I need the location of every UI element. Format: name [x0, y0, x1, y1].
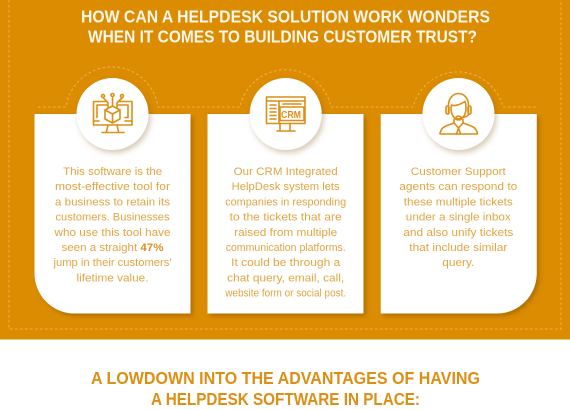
card 2 text: chat query, email, call, — [227, 272, 344, 284]
title: WHEN IT COMES TO BUILDING CUSTOMER TRUST? — [88, 27, 477, 47]
card 3 text: Customer Support — [411, 166, 506, 178]
card 2 icon circle — [250, 78, 322, 150]
dashed connector with arcs — [38, 67, 536, 107]
card 3 text: these multiple tickets — [404, 196, 513, 208]
card 1 text: a business to retain its — [55, 196, 171, 208]
card 3 text: agents can respond to — [399, 181, 517, 193]
card 2 text: communication platforms. — [226, 242, 346, 254]
panel: card 2 — [208, 78, 364, 314]
panel: card 1 — [34, 78, 190, 314]
section heading: A LOWDOWN INTO THE ADVANTAGES OF HAVING — [91, 368, 480, 388]
card 3 text: query. — [442, 257, 474, 269]
card 3 text — [399, 166, 517, 269]
card 3 text: that include similar — [409, 242, 508, 254]
icon: monitor with cube — [94, 94, 132, 132]
card 2 text: website form or social post. — [224, 288, 346, 300]
panel: card 3 — [381, 78, 537, 314]
card 2 text: companies in responding — [225, 196, 346, 208]
title — [81, 7, 490, 47]
card 1 text: customers. Businesses — [56, 212, 170, 224]
icon: CRM monitor: CRM — [281, 110, 301, 121]
card 2 text: to the tickets that are — [230, 212, 342, 224]
card 1 text — [52, 166, 172, 284]
card 2 background — [208, 114, 364, 314]
card 3 text: under a single inbox — [406, 212, 511, 224]
card 2 text: Our CRM Integrated — [234, 166, 338, 178]
card 1 text: This software is the — [63, 166, 162, 178]
title: HOW CAN A HELPDESK SOLUTION WORK WONDERS — [81, 7, 490, 27]
card 3 background — [381, 114, 537, 314]
card 2 text — [224, 166, 346, 300]
dashed frame — [9, 0, 561, 329]
card 2 text: raised from multiple — [234, 227, 337, 239]
section heading — [91, 368, 480, 409]
card 2 text: HelpDesk system lets — [232, 181, 340, 193]
card 3 text: and also unify tickets — [403, 227, 514, 239]
card 1 text: who use this tool have — [53, 227, 171, 239]
card 1 text: lifetime value. — [76, 272, 148, 284]
card 1 background — [34, 114, 190, 314]
icon: support agent — [440, 94, 478, 134]
section heading: A HELPDESK SOFTWARE IN PLACE: — [151, 389, 420, 409]
card 2 text: It could be through a — [231, 257, 341, 269]
card 1 text: jump in their customers' — [52, 257, 172, 269]
card 1 text: seen a straight 47% — [62, 242, 164, 254]
card 1 icon circle — [76, 78, 148, 150]
card 1 text: most-effective tool for — [55, 181, 170, 193]
card 3 icon circle — [422, 78, 494, 150]
icon: CRM monitor — [266, 97, 305, 131]
